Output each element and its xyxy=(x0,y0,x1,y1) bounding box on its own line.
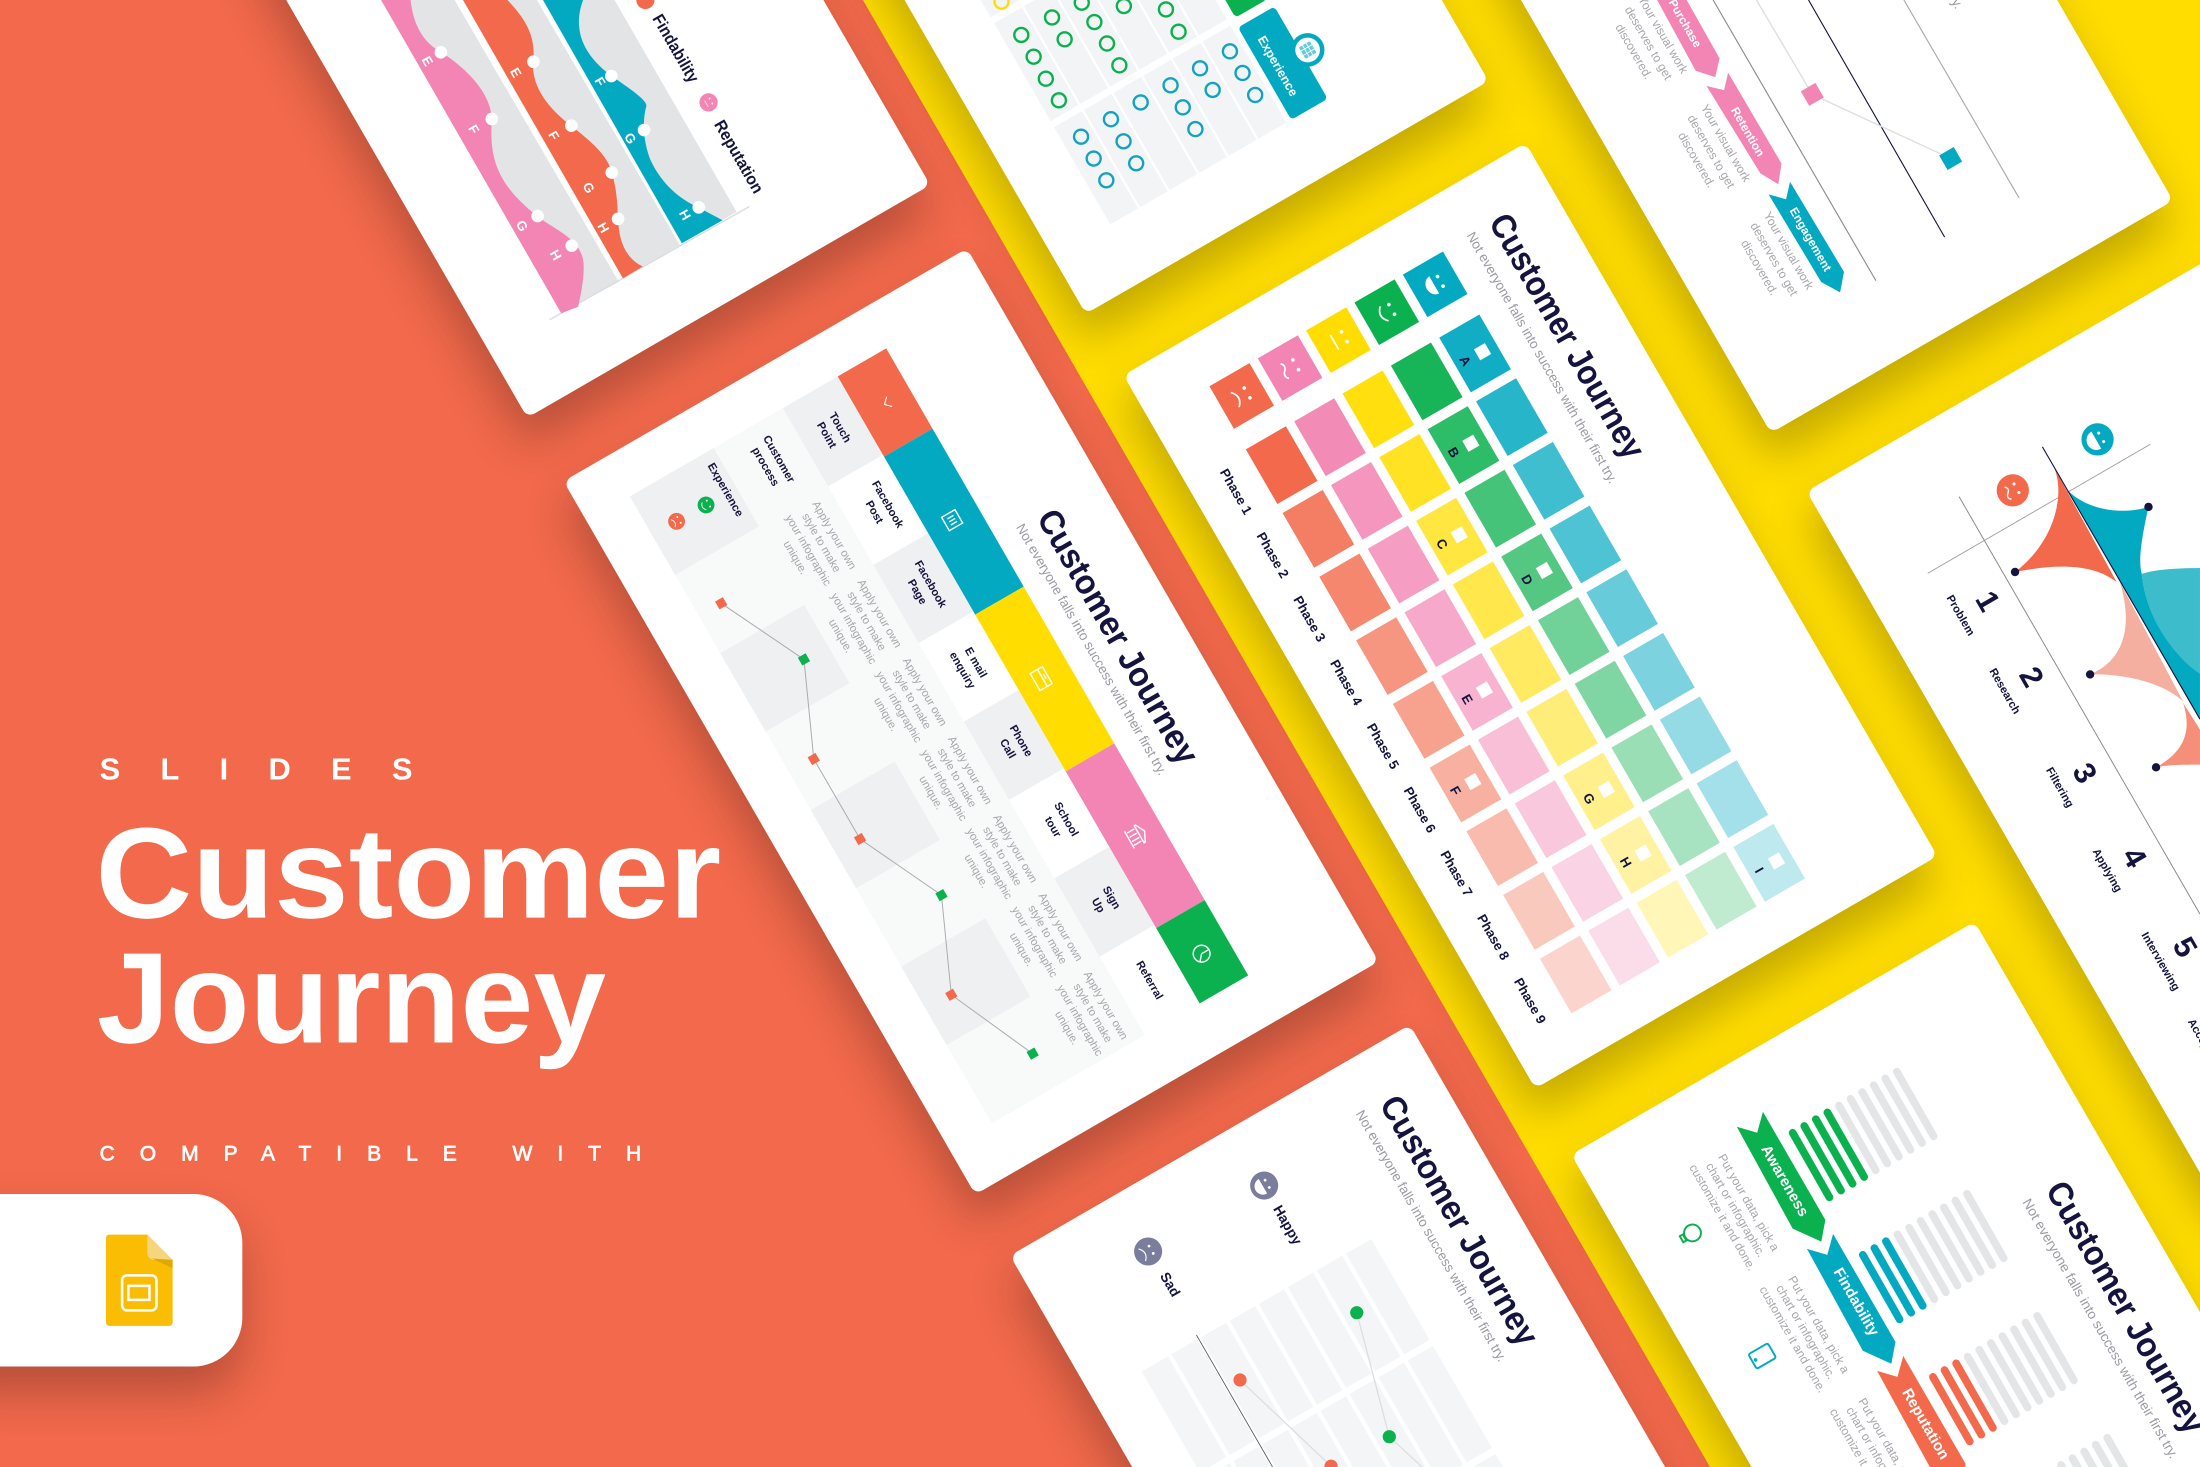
marker tags A to I: D xyxy=(1518,572,1536,588)
row: Touch Point labels: Call xyxy=(997,737,1018,761)
row: Touch Point labels: Referral xyxy=(1133,959,1165,1002)
arrow: Awareness: Awareness xyxy=(1757,1142,1812,1220)
heading: SLIDES: SLIDES xyxy=(100,751,413,786)
row: Touch Point labels: tour xyxy=(1042,815,1063,840)
phase labels: Phase 5 xyxy=(1364,721,1402,772)
marker tags A to I: A xyxy=(1456,353,1474,369)
dots: teal xyxy=(1074,44,1262,187)
row: Customer process: Apply your own xyxy=(1081,970,1130,1042)
legend: Reputation: Reputation xyxy=(710,117,767,197)
phase labels: Phase 9 xyxy=(1511,975,1549,1026)
badge: Google Slides xyxy=(0,1194,242,1367)
row: Touch Point labels: Facebook xyxy=(912,559,949,611)
title: Customer Journey xyxy=(1372,1089,1546,1352)
slide card: numbered journey curve xyxy=(1807,259,2200,1202)
wave: orange: F xyxy=(545,128,562,143)
wave: orange xyxy=(463,0,643,278)
step labels: Filtering xyxy=(2043,765,2076,810)
wave: pink: E xyxy=(419,53,436,69)
bars: fourth stage xyxy=(2049,1438,2144,1467)
icon: Google Slides file xyxy=(106,1235,173,1326)
line chart markers xyxy=(1756,0,1962,170)
colour header band xyxy=(838,348,1248,1003)
step numbers: 4 xyxy=(2115,841,2154,873)
label: COMPATIBLE WITH: COMPATIBLE WITH xyxy=(100,1142,641,1165)
marker tags A to I: H xyxy=(1617,854,1635,870)
chip: green header xyxy=(1182,0,1267,18)
slide card: phase heatmap xyxy=(1123,143,1937,1088)
row: Customer process: unique. xyxy=(916,774,945,812)
label: Happy: Happy xyxy=(1270,1202,1306,1248)
slide card: wave chart xyxy=(117,0,930,418)
heading: Customer Journey: Customer xyxy=(95,802,721,946)
row: Touch Point labels: E mail xyxy=(962,645,989,680)
row: Experience: Experience xyxy=(705,461,745,519)
arrow: Retention: Your visual work xyxy=(1698,102,1754,185)
row: Customer process: Customer xyxy=(760,434,797,485)
arrow: Findability: Findability xyxy=(1830,1265,1883,1340)
icon: tablet xyxy=(1748,1343,1776,1369)
arrow: Purchase: deserves to get xyxy=(1622,4,1675,83)
legend: Findability xyxy=(636,0,703,86)
row: Customer process: your infographic xyxy=(783,513,833,588)
row: Customer process: your infographic xyxy=(1009,905,1059,980)
row: Customer process: Apply your own xyxy=(855,578,903,650)
chip: Experience: Experience xyxy=(1255,34,1300,99)
row: Touch Point labels xyxy=(813,409,1175,1005)
icon: light bulb xyxy=(1677,1221,1704,1247)
row: Customer process: your infographic xyxy=(873,670,924,745)
row: Touch Point labels: Phone xyxy=(1007,723,1034,759)
grid strips xyxy=(1141,1239,1681,1467)
row: Customer process: unique. xyxy=(1007,931,1036,969)
wave: pink: H xyxy=(547,247,565,263)
arrow: Reputation xyxy=(1827,1356,1966,1467)
arrow: Retention: deserves to get xyxy=(1685,112,1738,191)
row: Customer process: process xyxy=(749,445,781,489)
phase labels: Phase 6 xyxy=(1401,784,1439,835)
arrow: Findability: customize it and done. xyxy=(1757,1284,1829,1395)
arrow: Purchase xyxy=(1606,0,1720,94)
row: Customer process: unique. xyxy=(781,539,809,577)
wave: teal: H xyxy=(676,207,694,223)
step labels: Applying xyxy=(2090,847,2124,894)
arrow: Awareness xyxy=(1686,1112,1825,1273)
row: Touch Point labels: Up xyxy=(1089,896,1107,915)
row: Touch Point labels: Page xyxy=(905,578,929,607)
subtitle: Not everyone falls into success with their first try. xyxy=(1353,1108,1510,1364)
row: Customer process: your infographic xyxy=(918,748,969,824)
legend: Findability: Findability xyxy=(649,11,703,86)
arrow: Engagement: Engagement xyxy=(1787,205,1835,274)
row: Touch Point labels: School xyxy=(1051,800,1080,839)
row: Touch Point labels: Facebook xyxy=(869,479,906,531)
phase labels: Phase 7 xyxy=(1437,848,1476,899)
step numbers: 3 xyxy=(2065,757,2104,789)
marker tags A to I: G xyxy=(1580,790,1598,807)
slide card: experience dots xyxy=(676,0,1489,314)
heatmap column: yellow xyxy=(1343,370,1708,958)
arrow: Awareness: chart or infographic. xyxy=(1703,1160,1768,1260)
marker tags A to I: F xyxy=(1447,784,1464,798)
step labels: Research xyxy=(1987,667,2022,716)
arrow: Retention xyxy=(1669,73,1781,202)
slide card: funnel stages with bars xyxy=(1571,922,2200,1467)
row: Customer process: Apply your own xyxy=(809,499,858,572)
label: Sad: Sad xyxy=(1157,1269,1184,1299)
wave: orange: G xyxy=(580,179,598,196)
subtitle: Not everyone falls into success with their first try. xyxy=(2019,1196,2181,1461)
title: Customer Journey xyxy=(1029,503,1206,771)
arrow: Findability: chart or infographic. xyxy=(1773,1282,1838,1382)
curve chart xyxy=(2011,447,2200,772)
row: Customer process: Apply your own xyxy=(1036,891,1084,964)
heading: Customer Journey xyxy=(95,802,721,1070)
step numbers: 1 xyxy=(1968,585,2007,617)
row: Touch Point labels: Touch xyxy=(826,410,853,445)
heatmap column: teal xyxy=(1439,315,1805,902)
arrow: Engagement: discovered. xyxy=(1738,237,1781,298)
row: Customer process: style to make xyxy=(980,825,1024,888)
wave: pink: G xyxy=(513,218,531,234)
wave: teal xyxy=(543,0,723,243)
row: Customer process: unique. xyxy=(1052,1009,1081,1047)
arrow: Purchase: discovered. xyxy=(1612,21,1655,82)
arrow: Retention: discovered. xyxy=(1675,130,1718,190)
arrow: Awareness: Put your data, pick a xyxy=(1715,1151,1782,1254)
background: yellow diagonal panel xyxy=(863,0,2200,1467)
icon: sad face xyxy=(1997,474,2029,506)
row: Customer process: style to make xyxy=(935,747,978,810)
row: Customer process: unique. xyxy=(871,696,900,734)
step numbers: 2 xyxy=(2012,661,2051,693)
face header squares xyxy=(1209,251,1467,429)
arrow: Reputation: Reputation xyxy=(1898,1386,1953,1463)
chip: Experience xyxy=(1238,0,1348,120)
bars: awareness xyxy=(1793,1072,1934,1197)
title: Customer Journey xyxy=(1481,207,1652,465)
row: Customer process: Apply your own xyxy=(990,813,1039,885)
arrow: Engagement xyxy=(1732,182,1844,310)
phase labels: Phase 8 xyxy=(1474,912,1512,963)
subtitle: Not everyone falls into success with their first try. xyxy=(1464,229,1620,486)
row: Customer process: Apply your own xyxy=(900,656,949,728)
row: Customer process: style to make xyxy=(844,590,888,653)
bars: findability xyxy=(1863,1194,2004,1319)
row: Touch Point labels: Post xyxy=(863,499,885,526)
legend: Reputation xyxy=(699,93,767,197)
marker tags A to I: C xyxy=(1433,536,1451,552)
wave: orange: E xyxy=(507,65,525,80)
marker tags A to I xyxy=(1262,343,1785,992)
icon: happy face xyxy=(2081,423,2114,456)
arrow: Findability xyxy=(1757,1234,1896,1395)
row: Customer process: style to make xyxy=(1071,982,1114,1045)
slide card: happy and sad chart xyxy=(1010,1025,1820,1467)
row: Customer process: your infographic xyxy=(1054,983,1105,1059)
icon: sad face xyxy=(1134,1237,1162,1266)
step numbers xyxy=(1968,585,2200,963)
row: Customer process xyxy=(730,429,1131,1066)
wave: pink xyxy=(381,0,584,313)
table grid xyxy=(630,376,1200,1123)
icon: happy face xyxy=(1250,1172,1278,1200)
subtitle: Not everyone falls into success with their first try. xyxy=(1013,521,1170,778)
heatmap column: pink xyxy=(1294,398,1660,985)
arrow: Awareness: customize it and done. xyxy=(1686,1162,1759,1273)
heatmap column: green xyxy=(1391,342,1757,930)
row: Customer process: unique. xyxy=(962,852,990,890)
arrow: Retention: Retention xyxy=(1728,104,1768,159)
wave: teal: G xyxy=(621,130,639,147)
step labels: Interviewing xyxy=(2139,930,2182,993)
phase labels: Phase 4 xyxy=(1327,657,1366,709)
row: Customer process: style to make xyxy=(799,511,843,575)
row: Customer process: your infographic xyxy=(964,826,1014,902)
slide card: stage arrows xyxy=(1365,0,2173,433)
dot chart xyxy=(1196,1306,1459,1467)
row: Customer process: style to make xyxy=(1025,903,1069,966)
phase labels xyxy=(1217,466,1549,1026)
row: Customer process: style to make xyxy=(890,668,933,731)
row: Touch Point labels: Sign xyxy=(1100,884,1122,912)
dots: green xyxy=(1014,0,1186,107)
step labels xyxy=(1944,593,2200,1070)
heatmap column: orange xyxy=(1246,426,1612,1013)
marker tags A to I: I xyxy=(1752,865,1767,876)
row: Customer process: Apply your own xyxy=(945,734,994,807)
row: Touch Point labels: enquiry xyxy=(947,650,978,692)
arrow: Engagement: deserves to get xyxy=(1747,220,1801,299)
marker tags A to I: E xyxy=(1458,692,1476,707)
row: Customer process: unique. xyxy=(826,617,855,655)
step labels: Problem xyxy=(1944,593,1976,638)
bars: reputation xyxy=(1933,1316,2074,1441)
experience line chart xyxy=(715,597,1039,1060)
wave: pink: F xyxy=(465,122,482,137)
arrow: Engagement: Your visual work xyxy=(1761,209,1817,293)
row: Experience xyxy=(653,461,745,549)
wave: teal: F xyxy=(591,74,608,89)
wave: orange: H xyxy=(594,220,612,236)
phase labels: Phase 3 xyxy=(1290,593,1329,644)
marker tags A to I: B xyxy=(1445,444,1463,461)
arrow: Findability: Put your data, pick a xyxy=(1785,1273,1852,1376)
row: Touch Point labels: Point xyxy=(814,420,839,451)
phase labels: Phase 2 xyxy=(1254,530,1292,581)
heading: Customer Journey: Journey xyxy=(97,926,606,1070)
slide card: touch point table xyxy=(564,248,1379,1194)
phase labels: Phase 1 xyxy=(1217,466,1255,518)
row: Customer process: your infographic xyxy=(828,591,878,667)
